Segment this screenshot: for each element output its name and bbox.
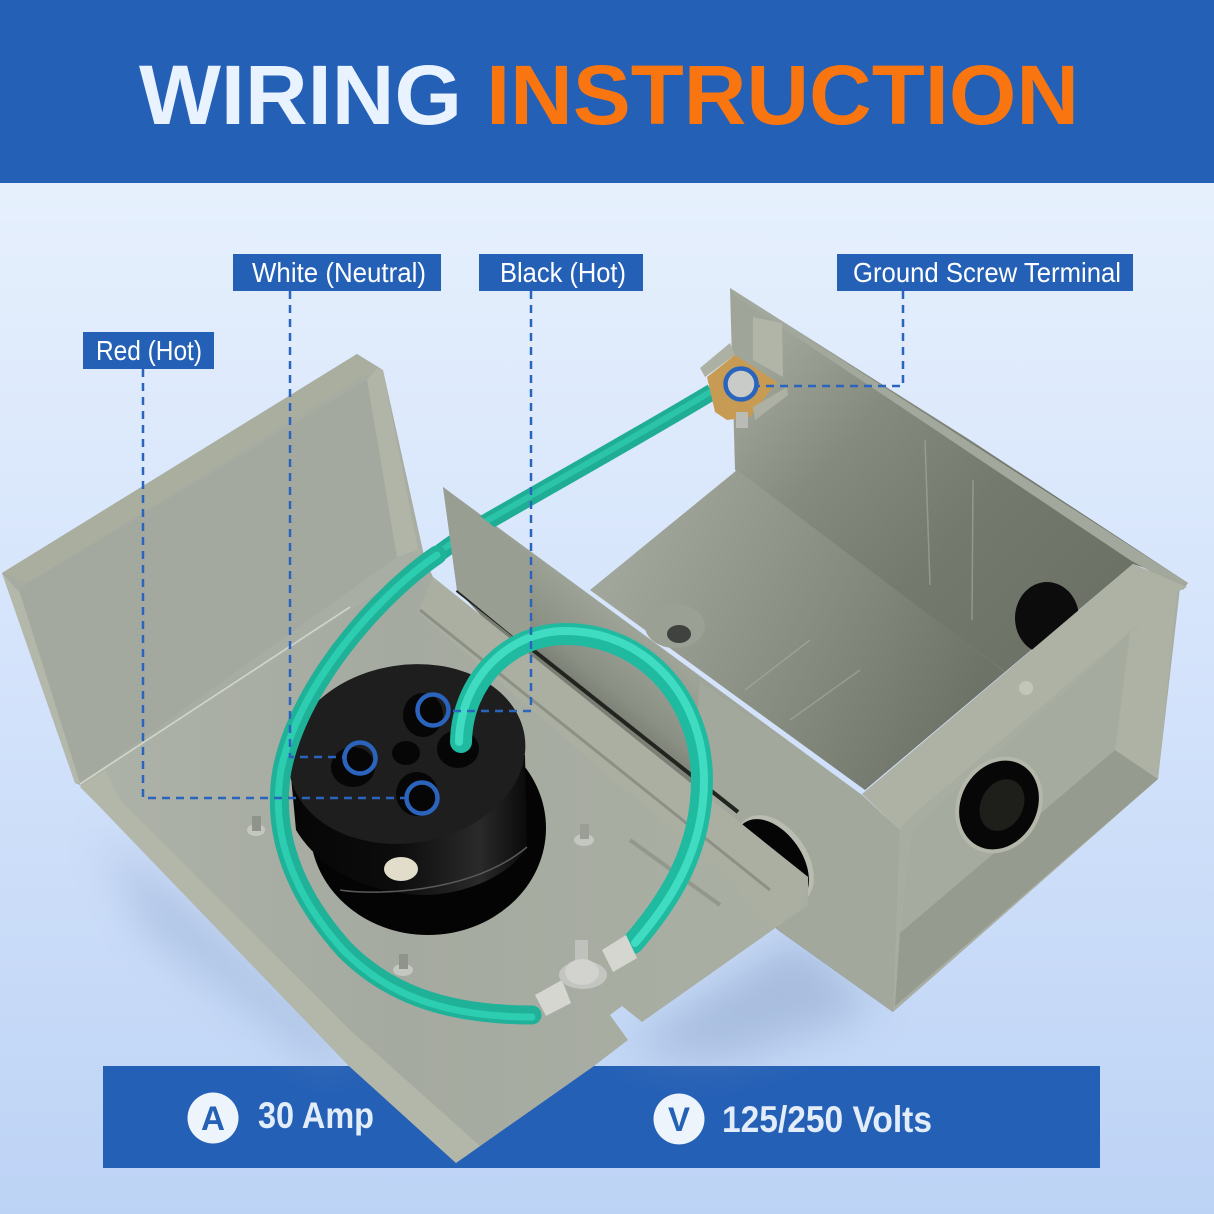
right box: [443, 288, 1188, 1012]
box floor: [590, 470, 1005, 790]
icon: amp: [188, 1092, 238, 1144]
outer strip: [80, 770, 480, 1163]
rear grommet: [1015, 582, 1079, 654]
black hot line: [448, 291, 531, 711]
header band: [0, 0, 1214, 183]
ground bolt and crimp terminals: [535, 935, 637, 1016]
ratings bar: [103, 1066, 1100, 1168]
left lid back wall: [2, 354, 425, 785]
title: WIRING INSTRUCTION: [139, 48, 1079, 142]
icon: amp: A: [201, 1100, 225, 1138]
side wall: [443, 487, 900, 1012]
left lid floor: [80, 560, 808, 1163]
top rim of back wall: [730, 288, 1188, 590]
side hole: [384, 857, 418, 881]
receptacle slots: [331, 693, 479, 816]
amp rating: 30 Amp: [258, 1095, 374, 1136]
red hot line: [143, 369, 408, 798]
white neutral line: [290, 291, 345, 757]
back wall: [730, 288, 1188, 672]
ground lug: [700, 317, 788, 428]
green ground wires: [278, 555, 704, 1017]
label: Red (Hot): Red (Hot): [96, 335, 202, 366]
label: Ground Screw Terminal: Ground Screw Terminal: [853, 257, 1121, 288]
small screws: [247, 816, 594, 976]
icon: volt: V: [668, 1101, 690, 1139]
divider front sliver: [443, 487, 530, 650]
divider shadow: [457, 590, 738, 812]
label: White (Neutral): White (Neutral): [252, 257, 426, 288]
drain hole: [645, 604, 705, 648]
side grommet: [720, 801, 830, 919]
callout rings: [344, 368, 756, 814]
long ground wire, rear run: [437, 391, 712, 555]
open metal enclosure: [2, 288, 1188, 1163]
ground line: [756, 291, 903, 386]
front rim band: [862, 564, 1187, 830]
soft shadows under enclosure: [100, 830, 880, 1066]
fold line: [80, 607, 350, 784]
volt rating: 125/250 Volts: [722, 1099, 932, 1140]
long wire: [278, 555, 532, 1017]
icon: volt: [654, 1094, 704, 1144]
label: Black (Hot): Black (Hot): [500, 257, 626, 288]
front face: [893, 588, 1180, 1012]
slots: [630, 840, 720, 905]
callout lines: [143, 291, 903, 798]
short wire: [459, 631, 704, 943]
front grommet: [938, 741, 1060, 869]
flange band: [418, 577, 808, 930]
black receptacle: [276, 647, 546, 935]
